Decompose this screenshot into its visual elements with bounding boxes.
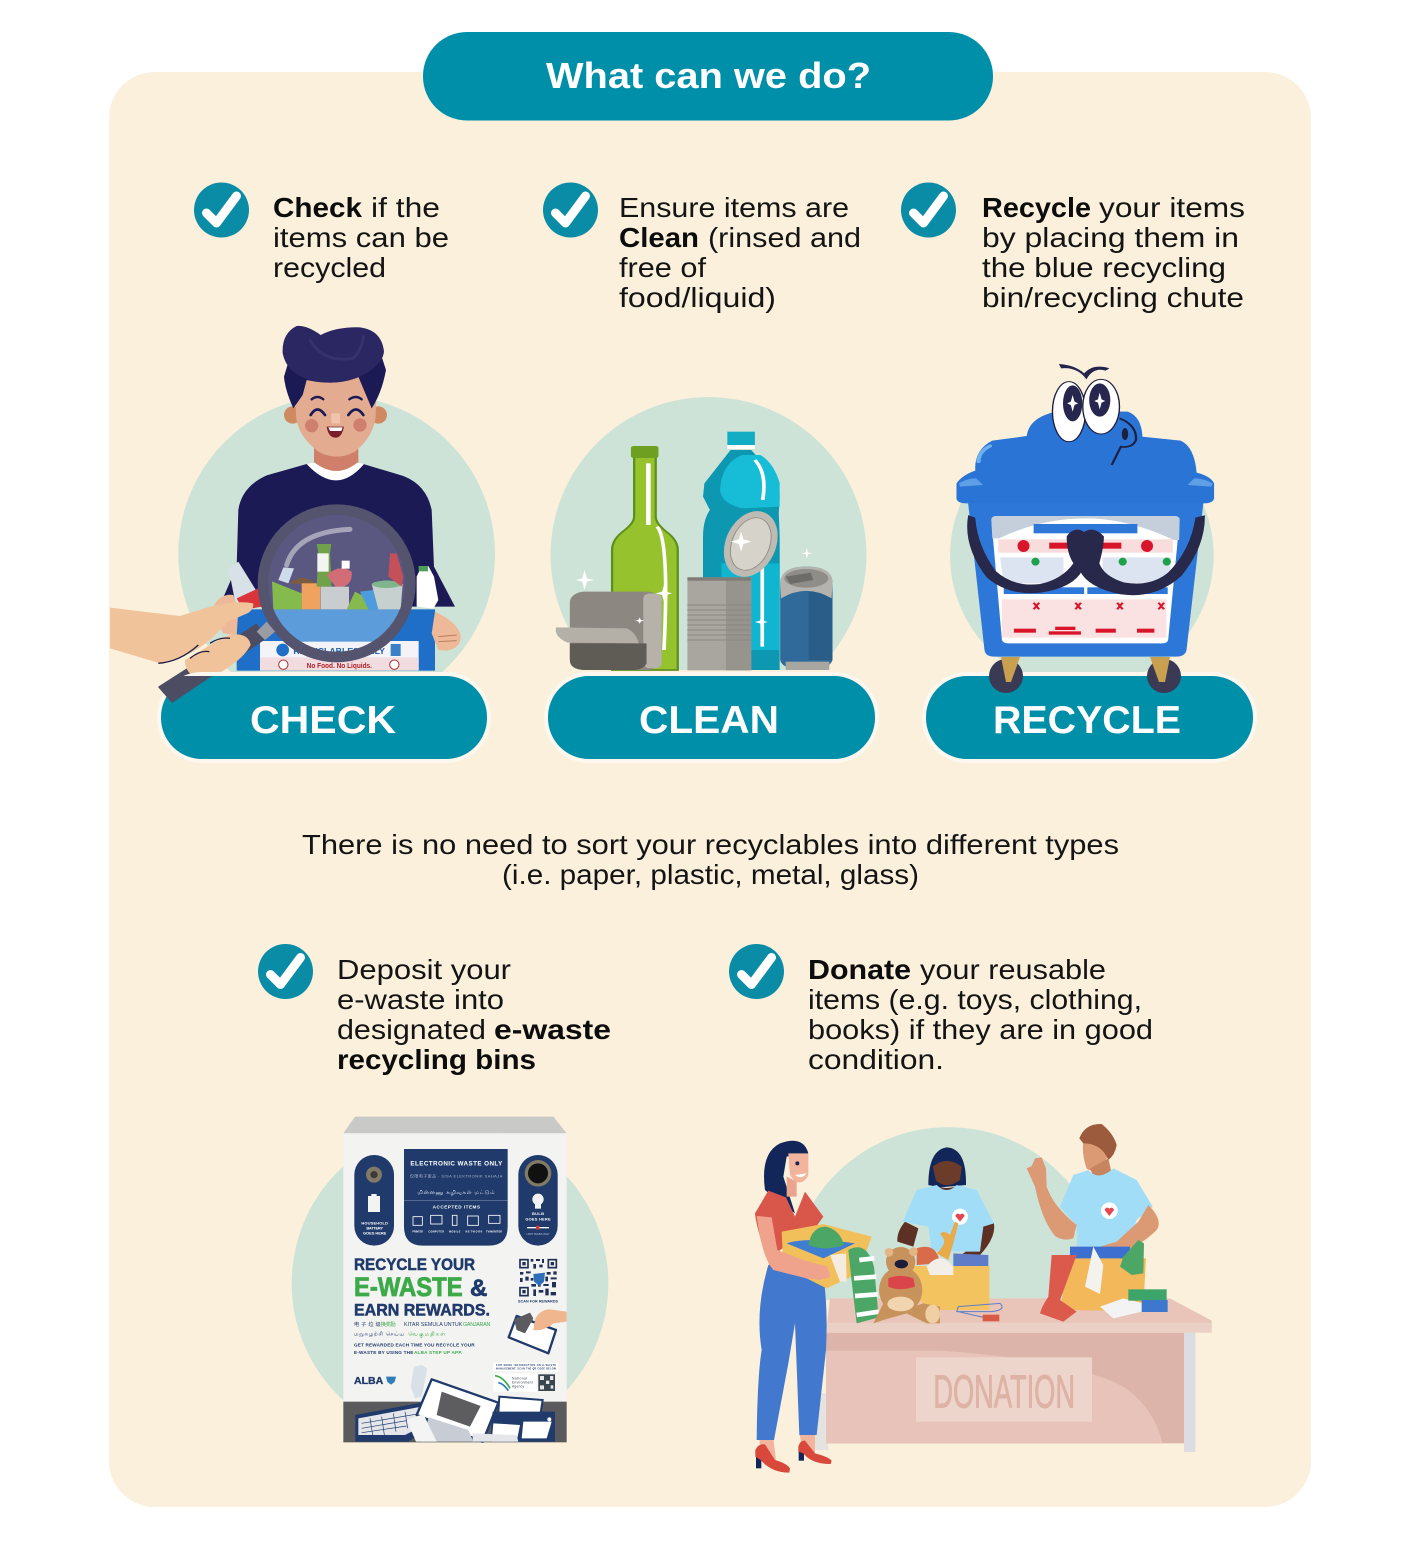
recycling box with items [229, 562, 461, 671]
text: check: items can be [273, 222, 449, 253]
tip: e-waste [258, 944, 611, 1075]
text: e-waste: designated [337, 1014, 486, 1045]
agency block: Environment [512, 1380, 533, 1384]
e-waste slot panel: MOBILE [449, 1231, 461, 1233]
e-waste slot panel: COMPUTER [428, 1231, 444, 1233]
e-waste slot panel [404, 1149, 508, 1246]
poster body text: 换奖励 [381, 1320, 396, 1328]
text: donate: condition. [808, 1044, 944, 1075]
text: donate: items (e.g. toys, clothing, [808, 984, 1142, 1015]
poster body text [354, 1320, 490, 1355]
tip: donate [729, 944, 1153, 1075]
blue plastic bottle [703, 432, 780, 670]
CLEAN label pill [546, 674, 877, 761]
tin can [687, 577, 751, 670]
sardine tin [556, 592, 662, 670]
magnifier handle and hand [110, 595, 275, 703]
text: donate: Donate [808, 954, 911, 985]
icon: check mark 5 [729, 944, 784, 999]
text: check: if the [371, 192, 440, 223]
round metal lid [716, 508, 785, 580]
poster body text: GANJARAN [463, 1322, 490, 1328]
soda can [780, 567, 832, 670]
battery slot panel: HOUSEHOLD [361, 1220, 388, 1225]
text: recycle: the blue recycling [982, 252, 1226, 283]
magnifier handle over CHECK pill [158, 676, 212, 703]
illustration: blue recycling bin character [950, 364, 1214, 688]
poster body text: E-WASTE BY USING THE [354, 1350, 413, 1355]
e-waste slot panel: PRINTER [412, 1232, 423, 1234]
title pill [423, 32, 993, 120]
bulb slot panel: GOES HERE [525, 1216, 551, 1221]
note: no need to sort [302, 829, 1119, 890]
poster body text: ALBA STEP UP APP. [414, 1350, 462, 1355]
donation sign: DONATION [933, 1366, 1075, 1418]
poster body text: வெகுமதிகள் [408, 1332, 445, 1338]
battery slot panel [354, 1155, 394, 1246]
bin body [968, 502, 1204, 657]
magnifier lens with contents [260, 507, 413, 657]
background circle [551, 397, 866, 670]
eyes, brow and nose [1052, 364, 1136, 465]
text: e-waste: e-waste [494, 1014, 611, 1045]
text: recycle: Recycle [982, 192, 1091, 223]
battery slot panel: BATTERY [366, 1225, 383, 1230]
e-waste slot panel: NETWORK [466, 1231, 483, 1233]
text: check: Check [273, 192, 362, 223]
icon: check mark 4 [258, 944, 313, 999]
green glass bottle [612, 446, 678, 670]
text: clean: free of [619, 252, 706, 283]
sparkles [576, 532, 813, 627]
recycling box with items: No Food. No Liquids. [307, 661, 372, 670]
illustration: e-waste recycling bin [292, 1117, 608, 1442]
teddy bear [873, 1247, 940, 1323]
poster headline: & [470, 1275, 487, 1302]
icon: check mark 3 [901, 182, 956, 238]
e-waste slot panel: ELECTRONIC WASTE ONLY [410, 1161, 503, 1168]
background circle [292, 1125, 608, 1442]
CHECK label pill: CHECK [250, 699, 396, 742]
text: recycle: bin/recycling chute [982, 282, 1244, 313]
poster on bin [991, 516, 1180, 643]
text: e-waste: e-waste into [337, 984, 504, 1015]
background circle [790, 1127, 1107, 1300]
ALBA logo: ALBA [354, 1376, 383, 1387]
text: recycle: by placing them in [982, 222, 1239, 253]
note: no need to sort: (i.e. paper, plastic, metal, glass) [502, 859, 919, 890]
illustration: man checking recycling box with magnifier [110, 326, 495, 703]
title pill: What can we do? [546, 55, 871, 96]
poster body text: KITAR SEMULA UNTUK [404, 1322, 463, 1328]
note: no need to sort: There is no need to sort your recyclables into different types [302, 829, 1119, 860]
QR code: SCAN FOR REWARDS [518, 1300, 559, 1304]
poster body text: மறுசுழற்சி செய்ய [354, 1332, 404, 1338]
agency block: FOR MORE INFORMATION ON E-WASTE [496, 1364, 556, 1367]
bin body [343, 1117, 567, 1442]
e-waste slot panel: ACCEPTED ITEMS [433, 1204, 480, 1209]
text: recycle [982, 192, 1245, 313]
tip: clean [543, 182, 861, 313]
panel: cream background [109, 72, 1311, 1507]
recycling box with items: RECYCLABLES ONLY [293, 647, 386, 656]
man figure [219, 326, 455, 607]
text: e-waste [337, 954, 611, 1075]
background circle [950, 424, 1214, 688]
QR code [518, 1258, 559, 1304]
ALBA logo [354, 1376, 396, 1387]
tip: recycle [901, 182, 1245, 313]
icon: check mark 1 [194, 182, 249, 238]
text: recycle: your items [1099, 192, 1245, 223]
text: clean: (rinsed and [708, 222, 861, 253]
poster headline: EARN REWARDS. [354, 1302, 490, 1320]
poster body text: GET REWARDED EACH TIME YOU RECYCLE YOUR [354, 1343, 475, 1348]
bulb slot panel [518, 1155, 558, 1246]
agency block: Agency [512, 1384, 524, 1388]
text: donate: books) if they are in good [808, 1014, 1153, 1045]
e-waste slot panel: மின்னணு கழிவுகள் மட்டும் [417, 1189, 495, 1196]
background circle [178, 396, 495, 673]
illustration: clean bottles and cans [551, 397, 866, 670]
text: e-waste: recycling bins [337, 1044, 536, 1075]
devices illustration [355, 1365, 555, 1442]
moustache [969, 517, 1204, 594]
poster headline: RECYCLE YOUR [354, 1256, 475, 1274]
agency block: National [512, 1376, 527, 1380]
text: check: recycled [273, 252, 386, 283]
text: e-waste: Deposit your [337, 954, 511, 985]
RECYCLE label pill: RECYCLE [993, 699, 1181, 742]
table [815, 1298, 1212, 1452]
tip: check [194, 182, 449, 283]
e-waste slot panel: 仅限电子废品 · SISA ELEKTRONIK SAHAJA [410, 1173, 503, 1179]
text: clean [619, 192, 861, 313]
text: clean: Clean [619, 222, 699, 253]
text: clean: food/liquid) [619, 282, 776, 313]
CHECK label pill [159, 674, 489, 761]
text: check [273, 192, 449, 283]
RECYCLE label pill [924, 674, 1255, 761]
woman at centre with box [897, 1147, 1002, 1321]
woman holding a box [755, 1141, 879, 1473]
text: clean: Ensure items are [619, 192, 849, 223]
agency block: MANAGEMENT, SCAN THE QR CODE BELOW [496, 1368, 557, 1371]
man waving with box [1027, 1124, 1168, 1322]
bulb slot panel: BULB [532, 1211, 544, 1216]
icon: check mark 2 [543, 182, 598, 238]
text: donate: your reusable [920, 954, 1106, 985]
text: donate [808, 954, 1153, 1075]
CLEAN label pill: CLEAN [639, 699, 779, 742]
donation sign [916, 1357, 1092, 1422]
phone and hand [509, 1309, 567, 1353]
battery slot panel: GOES HERE [363, 1230, 387, 1235]
poster headline: E-WASTE [354, 1272, 463, 1302]
agency block [493, 1363, 558, 1392]
illustration: donation table with volunteers [755, 1124, 1212, 1473]
poster headline [354, 1256, 490, 1320]
e-waste slot panel: TV/MONITOR [486, 1231, 502, 1233]
bulb slot panel: LIGHT BULBS ONLY [526, 1234, 550, 1236]
bin lid [956, 411, 1214, 503]
bin wheels over RECYCLE pill [989, 657, 1181, 693]
poster body text: 电子垃圾 [354, 1320, 381, 1328]
